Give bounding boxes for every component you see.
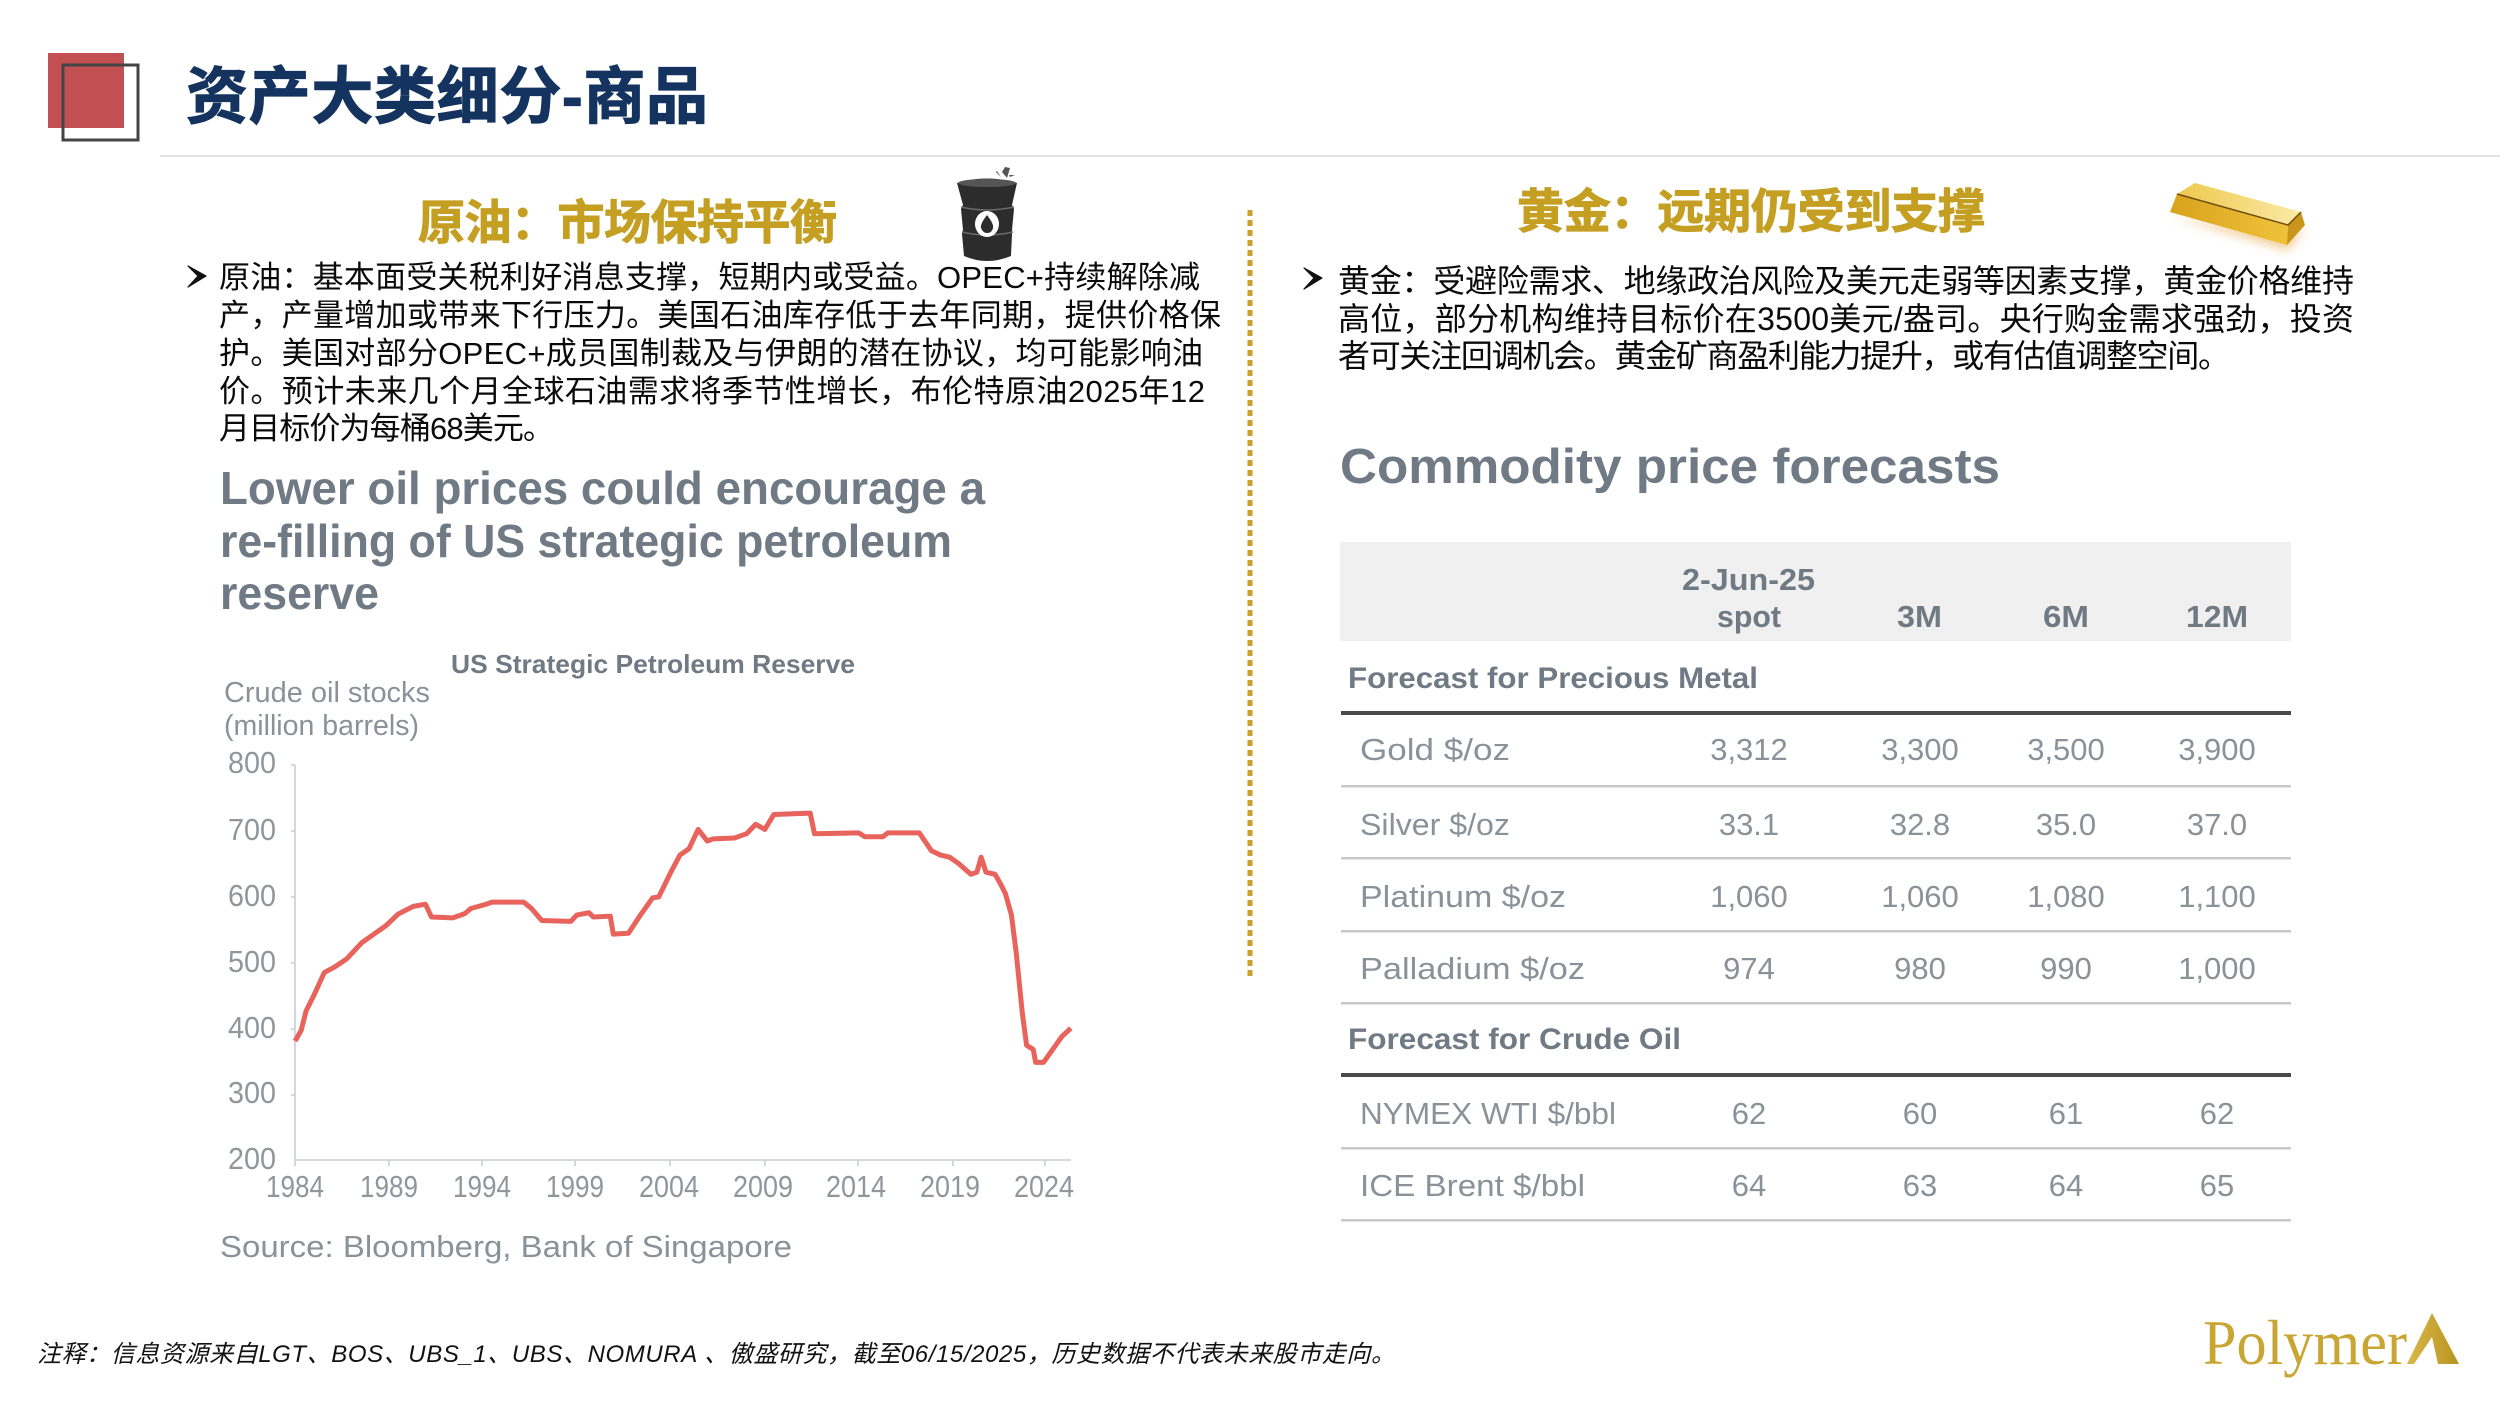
text block: crude oil commentary: 原油：基本面受关税利好消息支撑，短期内或受益。OPEC+持续解除减 (219, 260, 1200, 295)
row: Brent: 64 (1732, 1168, 1766, 1203)
chart heading: reserve (220, 567, 379, 619)
table header: spot (1717, 599, 1781, 634)
y axis labels: 500 (228, 944, 276, 979)
row: platinum (1341, 879, 2291, 932)
row: WTI: NYMEX WTI $/bbl (1360, 1096, 1616, 1131)
section: crude oil: Forecast for Crude Oil (1348, 1023, 1681, 1056)
row: silver: Silver $/oz (1360, 807, 1510, 842)
row: silver (1341, 807, 2291, 860)
data line (295, 813, 1071, 1062)
row: WTI (1341, 1096, 2291, 1150)
table: commodity price forecasts (1340, 542, 2291, 1222)
text block: crude oil commentary: 月目标价为每桶68美元。 (219, 411, 554, 446)
row: palladium: 974 (1723, 951, 1775, 986)
x axis labels: 1999 (546, 1169, 604, 1204)
row: Brent (1341, 1168, 2291, 1222)
row: gold: 3,300 (1881, 732, 1959, 767)
y axis labels: 700 (228, 812, 276, 847)
row: palladium: 990 (2040, 951, 2092, 986)
section: crude oil (1341, 1023, 2291, 1077)
y axis title: Crude oil stocks (224, 677, 430, 709)
row: gold: Gold $/oz (1360, 732, 1510, 767)
row: platinum: 1,060 (1881, 879, 1959, 914)
x axis labels: 2024 (1014, 1169, 1074, 1204)
row: silver: 33.1 (1719, 807, 1779, 842)
text block: gold commentary: 高位，部分机构维持目标价在3500美元/盎司。央行购金需求强劲，投资 (1338, 301, 2354, 337)
footnote: 注释：信息资源来自LGT、BOS、UBS_1、UBS、NOMURA 、傲盛研究，截至06/15/2025，历史数据不代表未来股市走向。 (37, 1341, 1395, 1368)
table header: 6M (2043, 599, 2089, 634)
chart title: US Strategic Petroleum Reserve (451, 649, 855, 679)
icon: title marker squares (48, 53, 138, 140)
x axis labels: 2004 (639, 1169, 699, 1204)
chart source: Source: Bloomberg, Bank of Singapore (220, 1229, 792, 1264)
row: palladium (1341, 951, 2291, 1004)
row: gold: 3,900 (2178, 732, 2256, 767)
row: Brent: 65 (2200, 1168, 2234, 1203)
line chart: US Strategic Petroleum Reserve (224, 649, 1074, 1204)
y axis title (224, 677, 430, 742)
row: palladium: 1,000 (2178, 951, 2256, 986)
section: precious metal (1341, 662, 2291, 715)
y axis title: (million barrels) (224, 710, 419, 742)
row: WTI: 62 (1732, 1096, 1766, 1131)
y axis labels (228, 745, 276, 1176)
heading: crude oil: 原油：市场保持平衡 (418, 196, 837, 249)
y axis labels: 600 (228, 878, 276, 913)
logo: Polymer: Polymer (2203, 1307, 2407, 1378)
table header: 12M (2186, 599, 2248, 634)
heading: gold: 黄金：远期仍受到支撑 (1517, 185, 1985, 238)
row: platinum: Platinum $/oz (1360, 879, 1566, 914)
x axis labels: 1984 (266, 1169, 324, 1204)
row: Brent: ICE Brent $/bbl (1360, 1168, 1585, 1203)
y axis labels: 300 (228, 1075, 276, 1110)
icon: gold bar (2170, 183, 2306, 250)
row: WTI: 61 (2049, 1096, 2083, 1131)
table header: 2-Jun-25 (1682, 562, 1815, 597)
y axis labels: 400 (228, 1010, 276, 1045)
table header (1340, 542, 2291, 641)
row: silver: 35.0 (2036, 807, 2096, 842)
text block: gold commentary (1304, 263, 2354, 374)
row: gold (1341, 732, 2291, 788)
title: 资产大类细分-商品 (186, 63, 708, 132)
x axis labels: 2014 (826, 1169, 886, 1204)
row: silver: 37.0 (2187, 807, 2247, 842)
x axis labels: 2019 (920, 1169, 980, 1204)
icon: oil barrel (957, 167, 1017, 261)
icon: bullet arrow (1304, 268, 1322, 289)
row: platinum: 1,100 (2178, 879, 2256, 914)
x axis labels: 1989 (360, 1169, 418, 1204)
y axis labels: 800 (228, 745, 276, 780)
row: Brent: 63 (1903, 1168, 1937, 1203)
section: precious metal: Forecast for Precious Metal (1348, 662, 1758, 695)
divider (1248, 210, 1252, 976)
row: gold: 3,500 (2027, 732, 2105, 767)
row: palladium: 980 (1894, 951, 1946, 986)
row: WTI: 62 (2200, 1096, 2234, 1131)
x axis labels (266, 1169, 1074, 1204)
chart heading: Lower oil prices could encourage a (220, 462, 985, 514)
chart heading (220, 462, 985, 619)
row: platinum: 1,080 (2027, 879, 2105, 914)
chart heading: re-filling of US strategic petroleum (220, 515, 952, 567)
row: WTI: 60 (1903, 1096, 1937, 1131)
table header: 3M (1897, 599, 1942, 634)
axes (291, 765, 1071, 1166)
table heading: Commodity price forecasts (1340, 440, 2000, 494)
text block: crude oil commentary: 价。预计未来几个月全球石油需求将季节性增长，布伦特原油2025年12 (219, 374, 1205, 409)
text block: gold commentary: 黄金：受避险需求、地缘政治风险及美元走弱等因素支撑，黄金价格维持 (1338, 263, 2354, 299)
row: gold: 3,312 (1710, 732, 1788, 767)
y axis labels: 200 (228, 1141, 276, 1176)
row: silver: 32.8 (1890, 807, 1950, 842)
text block: crude oil commentary: 产，产量增加或带来下行压力。美国石油库存低于去年同期，提供价格保 (219, 298, 1221, 333)
row: Brent: 64 (2049, 1168, 2083, 1203)
text block: crude oil commentary (188, 260, 1221, 446)
x axis labels: 1994 (453, 1169, 511, 1204)
x axis labels: 2009 (733, 1169, 793, 1204)
text block: crude oil commentary: 护。美国对部分OPEC+成员国制裁及与伊朗的潜在协议，均可能影响油 (219, 336, 1203, 371)
text block: gold commentary: 者可关注回调机会。黄金矿商盈利能力提升，或有估值调整空间。 (1338, 338, 2230, 374)
row: platinum: 1,060 (1710, 879, 1788, 914)
icon: bullet arrow (188, 266, 206, 287)
row: palladium: Palladium $/oz (1360, 951, 1585, 986)
